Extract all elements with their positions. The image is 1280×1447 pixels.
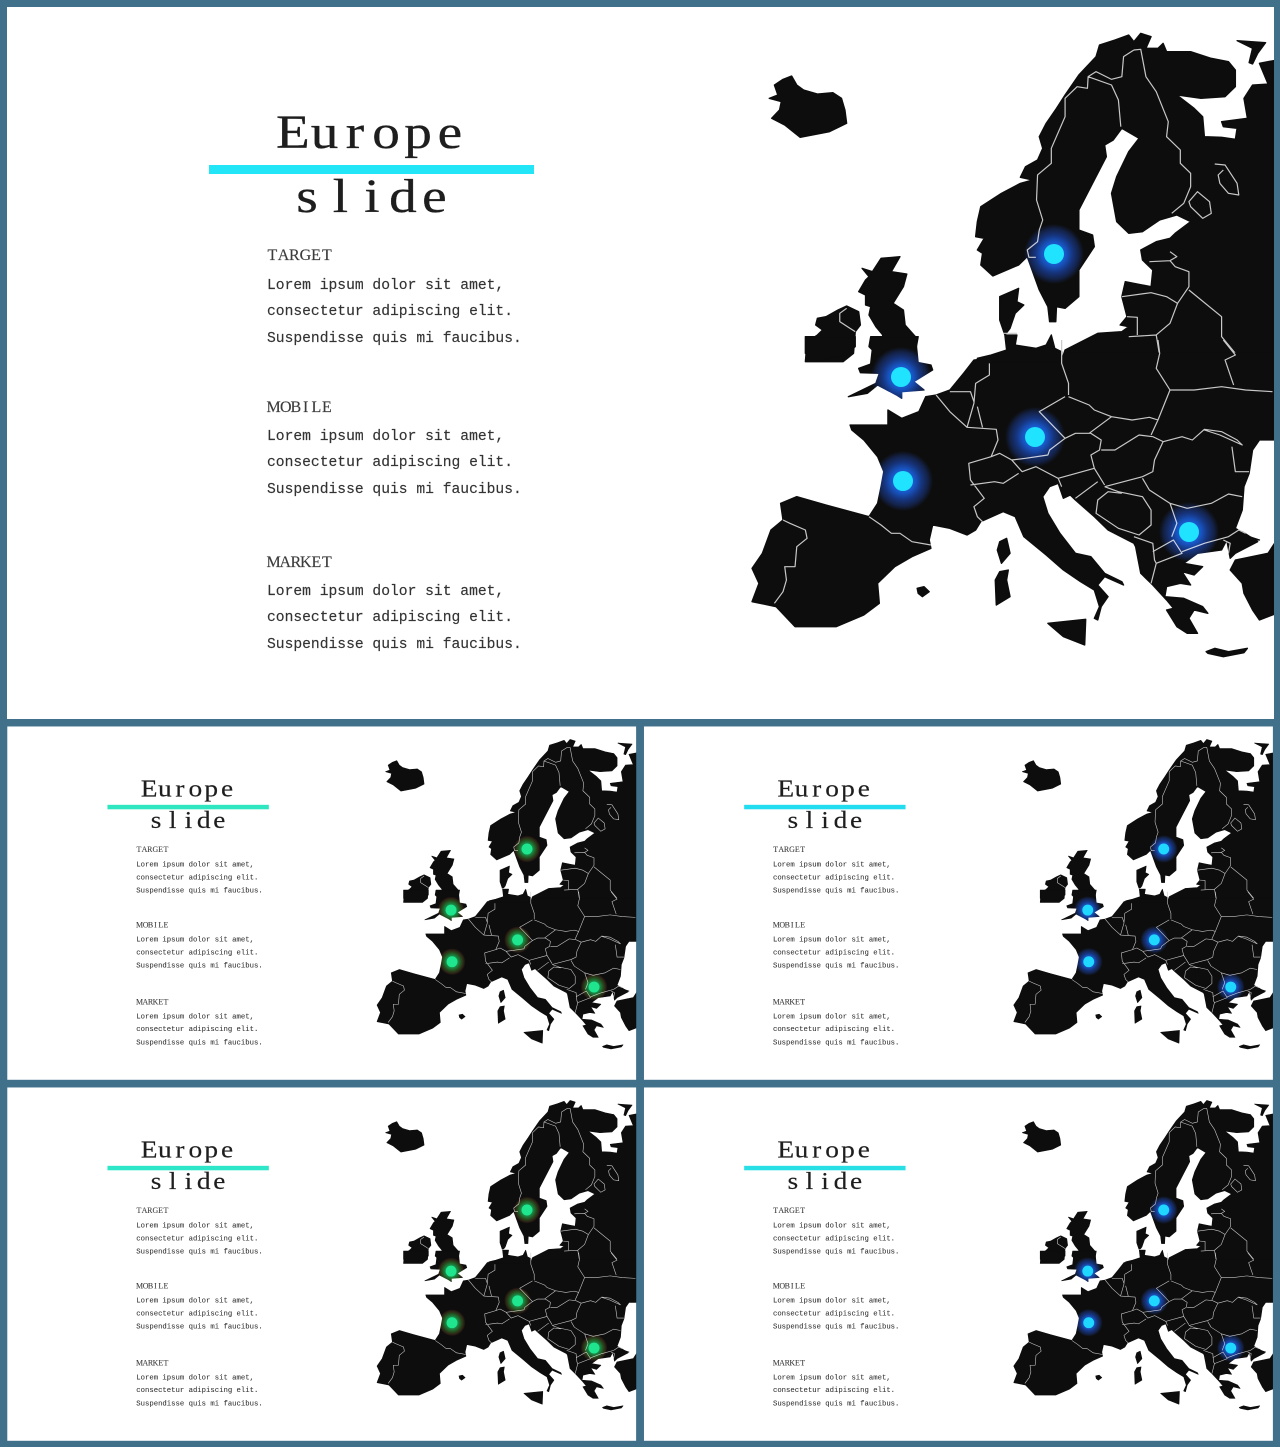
map of Europe — [377, 739, 638, 1049]
map of Europe — [752, 33, 1277, 657]
text block: market: MARKET — [136, 1358, 169, 1367]
title underline — [744, 805, 906, 809]
panel: green variant top left — [7, 726, 638, 1080]
title: slide: slide — [296, 170, 447, 223]
map markers — [438, 1197, 607, 1361]
map of Europe — [1014, 739, 1274, 1049]
text block: target: TARGET — [137, 845, 169, 854]
title: slide: slide — [787, 807, 862, 834]
text block: target: Lorem ipsum dolor sit amet, — [136, 1222, 254, 1230]
map markers — [438, 836, 607, 1000]
text block: mobile: Suspendisse quis mi faucibus. — [773, 1324, 899, 1332]
text block: market: MARKET — [136, 997, 169, 1006]
text block: market — [773, 997, 899, 1048]
text block: mobile: Lorem ipsum dolor sit amet, — [136, 936, 254, 944]
text block: mobile: consectetur adipiscing elit. — [267, 455, 513, 471]
text block: mobile: MOBILE — [136, 920, 169, 929]
text block: mobile — [773, 920, 899, 971]
text block: market: Suspendisse quis mi faucibus. — [773, 1401, 899, 1409]
text block: market — [136, 1358, 263, 1409]
text block: market: consectetur adipiscing elit. — [773, 1387, 895, 1395]
text block: mobile: Suspendisse quis mi faucibus. — [136, 963, 263, 971]
text block: market: Lorem ipsum dolor sit amet, — [267, 584, 504, 600]
text block: target: TARGET — [268, 247, 332, 264]
text block: target: Lorem ipsum dolor sit amet, — [773, 861, 891, 869]
text block: target: consectetur adipiscing elit. — [267, 304, 513, 320]
title underline — [744, 1166, 906, 1170]
text block: target — [773, 845, 899, 896]
text block: market: Suspendisse quis mi faucibus. — [136, 1401, 263, 1409]
text block: mobile: Suspendisse quis mi faucibus. — [267, 482, 522, 498]
text block: market: consectetur adipiscing elit. — [136, 1026, 258, 1034]
text block: market — [773, 1358, 899, 1409]
map markers — [1074, 835, 1245, 1001]
text block: target — [773, 1206, 899, 1257]
text block: market: MARKET — [773, 1358, 805, 1367]
map of Europe — [377, 1100, 638, 1410]
text block: mobile — [266, 399, 522, 498]
text block: target: consectetur adipiscing elit. — [773, 874, 895, 882]
title: slide: slide — [151, 1168, 225, 1195]
map markers — [871, 224, 1219, 562]
text block: mobile: MOBILE — [266, 399, 332, 416]
title: Europe: Europe — [141, 775, 233, 802]
text block: market: Lorem ipsum dolor sit amet, — [773, 1374, 891, 1382]
title underline — [107, 1166, 269, 1170]
text block: mobile: consectetur adipiscing elit. — [773, 1310, 895, 1318]
text block: mobile: MOBILE — [136, 1281, 169, 1290]
text block: target: Suspendisse quis mi faucibus. — [136, 1249, 263, 1257]
text block: market: MARKET — [773, 997, 805, 1006]
text block: market: consectetur adipiscing elit. — [773, 1026, 895, 1034]
text block: mobile: consectetur adipiscing elit. — [136, 1310, 258, 1318]
text block: mobile: Lorem ipsum dolor sit amet, — [773, 1297, 891, 1305]
text block: mobile: consectetur adipiscing elit. — [773, 949, 895, 957]
panel: blue variant top right — [644, 726, 1274, 1080]
text block: mobile: MOBILE — [773, 1281, 805, 1290]
text block: market: MARKET — [266, 554, 332, 571]
text block: target: Suspendisse quis mi faucibus. — [267, 331, 522, 347]
text block: market: Lorem ipsum dolor sit amet, — [773, 1013, 891, 1021]
text block: mobile — [773, 1281, 899, 1332]
title: Europe: Europe — [276, 106, 462, 159]
text block: market: Suspendisse quis mi faucibus. — [267, 637, 522, 653]
title: Europe: Europe — [777, 1136, 870, 1163]
title underline — [209, 165, 534, 174]
text block: target: TARGET — [773, 1206, 805, 1215]
title: Europe: Europe — [777, 775, 870, 802]
panel: blue variant bottom right — [644, 1087, 1274, 1441]
text block: target: Lorem ipsum dolor sit amet, — [267, 278, 504, 294]
text block: target: TARGET — [773, 845, 805, 854]
title: slide: slide — [151, 807, 225, 834]
map of Europe — [1014, 1100, 1274, 1410]
text block: mobile: consectetur adipiscing elit. — [136, 949, 258, 957]
text block: mobile — [136, 920, 263, 971]
text block: target: Suspendisse quis mi faucibus. — [773, 1249, 899, 1257]
text block: market — [136, 997, 263, 1048]
text block: mobile: Suspendisse quis mi faucibus. — [136, 1324, 263, 1332]
text block: target: Lorem ipsum dolor sit amet, — [136, 861, 254, 869]
text block: target: Suspendisse quis mi faucibus. — [773, 888, 899, 896]
text block: mobile: Suspendisse quis mi faucibus. — [773, 963, 899, 971]
text block: target: consectetur adipiscing elit. — [136, 874, 258, 882]
text block: market: Lorem ipsum dolor sit amet, — [136, 1374, 254, 1382]
text block: target — [267, 247, 522, 347]
text block: mobile: MOBILE — [773, 920, 805, 929]
text block: target: Lorem ipsum dolor sit amet, — [773, 1222, 891, 1230]
map markers — [1074, 1196, 1245, 1362]
text block: market: Suspendisse quis mi faucibus. — [773, 1040, 899, 1048]
panel: main slide — [7, 7, 1277, 719]
text block: market: consectetur adipiscing elit. — [136, 1387, 258, 1395]
text block: target: consectetur adipiscing elit. — [136, 1235, 258, 1243]
text block: mobile — [136, 1281, 263, 1332]
text block: market: Suspendisse quis mi faucibus. — [136, 1040, 263, 1048]
panel: green variant bottom left — [7, 1087, 638, 1441]
text block: target — [136, 1206, 263, 1257]
text block: target — [136, 845, 263, 896]
title underline — [107, 805, 269, 809]
text block: market: Lorem ipsum dolor sit amet, — [136, 1013, 254, 1021]
text block: mobile: Lorem ipsum dolor sit amet, — [267, 429, 504, 445]
title: slide: slide — [787, 1168, 862, 1195]
text block: mobile: Lorem ipsum dolor sit amet, — [136, 1297, 254, 1305]
text block: target: Suspendisse quis mi faucibus. — [136, 888, 263, 896]
text block: mobile: Lorem ipsum dolor sit amet, — [773, 936, 891, 944]
text block: target: consectetur adipiscing elit. — [773, 1235, 895, 1243]
title: Europe: Europe — [141, 1136, 233, 1163]
text block: market — [266, 554, 522, 653]
text block: market: consectetur adipiscing elit. — [267, 610, 513, 626]
text block: target: TARGET — [137, 1206, 169, 1215]
